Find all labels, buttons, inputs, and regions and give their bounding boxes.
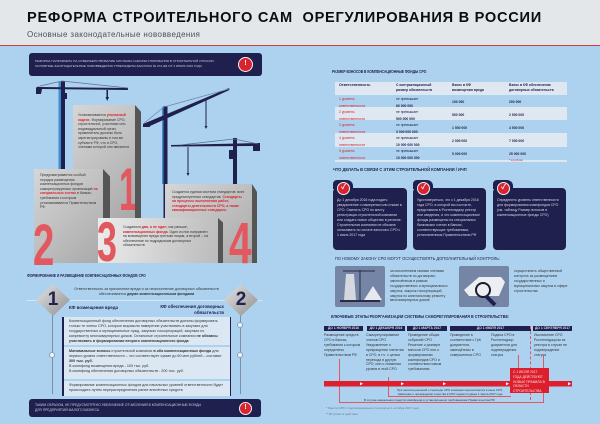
title: РЕФОРМА СТРОИТЕЛЬНОГО САМ ОРЕГУЛИРОВАНИЯ В РОССИИ [27,10,542,26]
block 4 [165,184,252,263]
size column: не превышает [396,97,418,101]
icon: crane 1 [36,81,128,171]
panel: formation [62,381,231,396]
timeline date 2: ДО 1 ДЕКАБРЯ 2016 [370,326,402,330]
banner: bottom notice [29,399,261,417]
timeline text 4: Приведение в соответствие с ГрК документов, замещённых в совершенных СРО [450,333,481,357]
image: scales [335,266,385,307]
harm fee column: 2 000 000 [452,139,467,143]
size column: не превышает [396,149,418,153]
banner: top notice: РЕФОРМА НАПРАВЛЕНА НА СОВЕРШЕНСТВОВАНИЕ СИСТЕМЫ САМОРЕГУЛИРОВАНИЯ В СТРОИТЕЛЬНОЙ ОТРАСЛИ. [35,59,214,63]
timeline text 2: Саморегулирование членов СРО [366,333,399,342]
panel: minimum fees: В компфонд возмещения вреда - 100 тыс. руб. [69,364,149,368]
panel: minimum fees: Минимальные взносы строительной компании в оба компенсационных фонда для первого уровня ответственности – что соответствует сумме до 60 млн рублей – составят 300 тыс. руб. [69,349,222,363]
block 1 [73,105,135,218]
heading: what to do: ЧТО ДЕЛАТЬ В СВЯЗИ С ЭТИМ СТРОИТЕЛЬНОЙ КОМПАНИИ / ИЧП [333,167,467,172]
block 1 side [135,105,141,218]
contract fee column: 2 500 000 [509,113,524,117]
size column: не превышает [396,123,418,127]
column header: договорных обязательств [509,88,554,92]
heading: timeline: КЛЮЧЕВЫЕ ЭТАПЫ РЕОРГАНИЗАЦИИ СИСТЕМЫ САМОРЕГУЛИРОВАНИЯ В СТРОИТЕЛЬСТВЕ: [331,314,509,319]
timeline text 2: Уведомление о прекращении членства в СРО, в т.ч. с целью перехода в другую СРО, или о снижении уровня в этой СРО [366,343,404,371]
contract fee column [509,100,526,156]
diamond 1: 1 [48,289,58,310]
harm fee column: 5 000 000 [452,152,467,156]
icon: alert: ! [244,60,247,67]
icon: alert [238,57,253,72]
card 1: До 1 декабря 2016 года подать уведомление о намерении или отказе в СРО. Сменить СРО по месту регистрации строительной компании или создать новое общество в регионе. Строительная компания не обязана оплачивать по оплате взносов к СРО с 1 июля 2017 года [337,198,402,237]
column header [452,83,484,92]
timeline text 3: Решение о размере взносов СРО или о формировании компфондов СРО и соответствии новым требованиям [408,343,441,371]
size column: 3 000 000 000 [396,130,418,134]
size column: не превышает [396,110,418,114]
contract fee column: 4 500 000 [509,126,524,130]
icon: check 1 [337,182,350,195]
panel: formation: Формирование компенсационных фондов для начальных уровней ответственности будет происходить путем перераспределения ранее внесённых средств [69,383,223,392]
connector: second long [388,377,511,397]
timeline ticks [360,382,571,385]
icon: alert: ! [244,404,247,411]
fund section [27,284,262,396]
column headers: Ответственность [339,83,371,87]
block 4: Создается единая система стандартов: всех предусмотренных стандартов. Стандарты на процессы выполнения работ, стандарты деятельности СРО, а также квалификационные стандарты [172,190,244,212]
connector: 4 to box [543,355,544,369]
intro text: Ответственность за причинение вреда и за неисполнение договорных обязательств обеспечивается двумя компенсационными фондами [74,287,219,296]
level column: ответственности [339,156,365,160]
timeline date 1 [324,326,363,331]
divider line [27,300,262,301]
vertical line right [240,314,241,394]
card 2 [413,188,486,250]
column header: Взнос в КФ обеспечения [509,83,551,87]
heading: contributions: РАЗМЕР ВЗНОСОВ В КОМПЕНСАЦИОННЫЕ ФОНДЫ СРО [332,69,426,74]
block 2 [34,169,103,263]
timeline date 2 [367,326,405,331]
timeline note 1: При наличии решений о переходе СРО компании перечисляются в иные СРО, заявление о прекращении членства в СРО подается ранее 1 марта 2017 года [397,388,503,396]
connector: first long [339,359,544,403]
size column: не превышает [396,136,418,140]
level column [339,97,365,160]
level column: ответственности [339,130,365,134]
row stripe [335,160,567,162]
icon: check 1: ✓ [341,184,346,191]
number 1: 1 [119,156,137,223]
footnotes: * Реестр СРО с подтверждённым статусом на 1 октября 2017 года [326,406,419,410]
subtitle: Основные законодательные нововведения [27,30,200,39]
size column [396,97,420,160]
icon: crane 3 [171,138,260,184]
diamond 2: 2 [236,289,246,310]
card 2 tab [413,180,433,189]
timeline note 2: В случае невнесения средств компфонда в установленном требованиями Правительства РФ [364,398,495,402]
icon: check 3: ✓ [501,184,506,191]
timeline text 5: Подача СРО в Ростехнадзор документов для подтверждения статуса [491,333,517,357]
harm fee column: 500 000 [452,113,464,117]
diamond 1 [36,284,70,316]
level column: 2 уровень [339,110,355,114]
timeline text 6: Исключение СРО Ростехнадзором из реестра в случае не подтверждения статуса [534,333,567,357]
banner: top notice [29,53,262,76]
callout: red box: С 1 ИЮЛЯ 2017 ГОДА ДЕЙСТВУЮТ НОВЫЕ ПРАВИЛА В ОБЛАСТИ СТРОИТЕЛЬСТВА [513,370,545,393]
icon: check 2 [417,182,430,195]
size column: 500 000 000 [396,116,415,120]
contract fee column: 7 000 000 [509,139,524,143]
table: contributions [335,82,567,162]
banner: bottom notice: ДЛЯ ПРЕДПРИЯТИЙ МАЛОГО БИЗНЕСА [35,408,99,412]
panel: contracts: Компенсационный фонд обеспечения договорных обязательств должны формировать только те члены СРО, которые выразили намерение участвовать в закупках для государственных и муниципальных нужд, закупках госкорпораций, закупках по капремонту многоквартирных домов. Остальные строительные компании не обязаны участвовать в формировании второго компенсационного фонда [69,319,218,343]
block 1: Устанавливается уголовный кодекс. Формирование СРО, строительной, участники или индивидуальный орган, применитель должны быть зарегистрированы в том же субъекте РФ, что и СРО, членами которой они являются [78,113,129,149]
column header: возмещения вреда [452,88,484,92]
label: fund 2: КФ обеспечения договорных обязательств [160,304,224,315]
harm fee column [452,100,467,156]
number 4: 4 [229,211,252,276]
column header [509,83,554,92]
timeline bar [324,381,572,386]
diamond 2 [224,284,258,316]
column header: С контрактационный [396,83,431,87]
level column: 3 уровень [339,123,355,127]
timeline text 1: Размещение средств СРО в банках, требования к которым определены Правительством РФ [324,333,360,357]
card 1 tab [333,180,353,189]
timeline date 3 [407,326,447,331]
connector: 3 to box [518,355,519,369]
label: fund 1: КФ возмещения вреда [69,305,118,310]
card 3: Определить уровень ответственности для формирования компфондов СРО (см. таблицу Размер взносов в компенсационные фонды СРО) [497,198,559,217]
size column: 60 000 000 [396,104,413,108]
panel edges [62,317,64,396]
banner: bottom notice: ТАКИМ ОБРАЗОМ, НЕ ПРЕДУСМОТРЕНО УВЕЛИЧЕНИЕ ОТЧИСЛЕНИЙ В КОМПЕНСАЦИОННЫЕ ФОНДЫ [35,403,201,407]
level column: 5 уровень [339,149,355,153]
block 4 side [252,184,257,263]
footnotes [326,406,419,416]
text: control 2: осуществлять общественный контроль за размещением государственных и муниципальных закупок в сфере строительства [514,269,567,293]
column header: Взнос в КФ [452,83,471,87]
panel: minimum fees [62,347,231,379]
icon: check 2: ✓ [421,184,426,191]
connector node [237,322,243,328]
banner: top notice: ОСНОВНЫЕ ЗАКОНОДАТЕЛЬНЫЕ НОВОВВЕДЕНИЯ УТВЕРЖДЕНЫ ЗАКОНОМ № 372-ФЗ ОТ 3 ИЮЛЯ 2016 ГОДА [35,64,202,68]
timeline date 3: ДО 1 МАРТА 2017 [413,326,441,330]
vertical line left [52,314,53,394]
level column: 1 уровень [339,97,355,101]
icon: alert [239,402,252,415]
icon: crane 2 [143,88,230,218]
footnotes: ** Вступает в действие [326,412,358,416]
row stripe [335,133,567,147]
card 2: Удостовериться, что к 1 декабря 2016 года СРО, в которой вы состоите, представила в Ростехнадзор реестр или сведения, и что компенсационные фонды размещены на специальных банковских счетах в банках, соответствующих требованиям, установленным Правительством РФ [417,198,480,237]
header band [0,0,600,46]
connector node [49,352,55,358]
card 1 [333,188,407,250]
column header [396,83,432,92]
heading: control: ПО НОВОМУ ЗАКОНУ СРО МОГУТ ОСУЩЕСТВЛЯТЬ ДОПОЛНИТЕЛЬНЫЙ КОНТРОЛЬ: [335,256,500,261]
number 3: 3 [97,210,117,273]
timeline text 3: Проведение общих собраний СРО [408,333,439,342]
block 2 side [103,169,110,218]
size column: 10 000 000 000 [396,142,420,146]
heading: funds: ФОРМИРОВАНИЕ И РАЗМЕЩЕНИЕ КОМПЕНСАЦИОННЫХ ФОНДОВ СРО [27,273,146,278]
level column: ответственности [339,116,365,120]
size column: 10 000 000 000 [396,156,420,160]
table header row [335,82,567,95]
timeline date 4 [450,326,531,331]
block 3 [98,218,218,263]
number 2: 2 [33,213,54,278]
connector node [237,352,243,358]
column header: размер обязательств [396,88,432,92]
block 2: Предусматривается особый порядок размещения компенсационных фондов саморегулируемых организаций на специальных счетах в банках, требования к которым устанавливаются Правительством РФ [40,173,98,209]
panel edges right [230,317,231,396]
timeline date 4: ДО 1 ИЮЛЯ 2017 [477,326,504,330]
harm fee column: 1 500 000 [452,126,467,130]
level column: ответственности [339,142,365,146]
level column: 4 уровень [339,136,355,140]
card 3 [493,188,566,250]
timeline date 1: ДО 1 НОЯБРЯ 2016 [328,326,359,330]
block 3 side [218,218,223,263]
dashed marker [530,326,531,400]
block 3: Создаются два, а не один, как раньше, компенсационных фонда. Один из них направлен на возмещение вреда третьим лицам, а второй – на обеспечение по подрядчикам договорных обязательств [123,225,208,247]
panel: minimum fees: В компфонд обеспечения договорных обязательств - 200 тыс. руб. [69,369,184,373]
text: control 1: за исполнением своими членами обязательств по договорам, заключённым в рамках государственных и муниципальных закупок, закупок госкорпораций, закупок по капитальному ремонту многоквартирных домов [390,269,448,302]
level column: ответственности [339,104,365,108]
harm fee column: 100 000 [452,100,464,104]
row stripe [335,107,567,120]
icon: check 3 [497,182,510,195]
card 3 tab [493,180,513,189]
contract fee column: 25 000 000 [509,152,526,156]
contract fee column: 200 000 [509,100,521,104]
timeline date 5: ДО 1 СЕНТЯБРЯ 2017 [535,326,570,330]
unit note: * в рублях [509,158,523,162]
image: bars and magnifier [459,266,509,307]
